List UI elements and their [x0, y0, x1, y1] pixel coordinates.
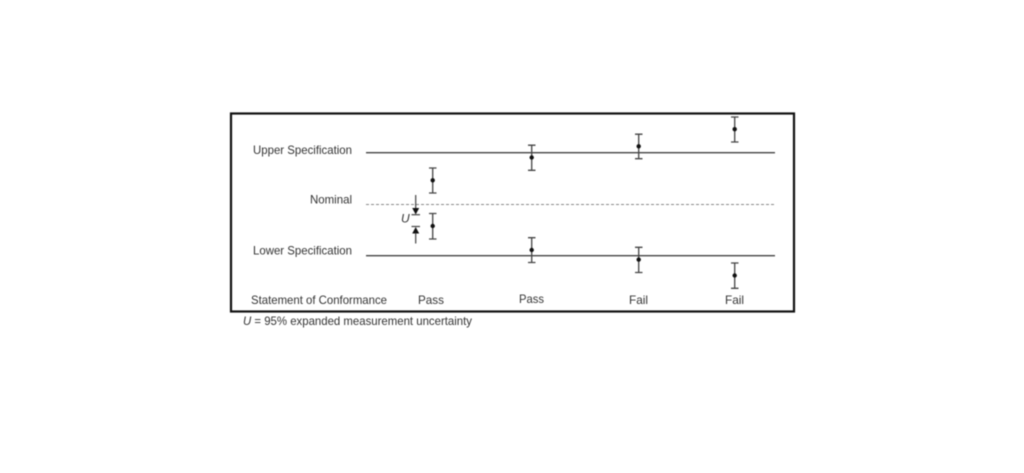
error bar: above upper limit, fail: [731, 117, 738, 142]
error bar: straddling lower limit, pass: [528, 238, 536, 262]
verdict: fail 2: Fail: [725, 293, 744, 307]
row label: statement of conformance: Statement of Conformance: [251, 293, 387, 307]
error bar: straddling upper limit, pass: [528, 145, 536, 170]
verdict: pass 2: Pass: [519, 292, 544, 306]
lower specification line: [366, 255, 775, 257]
upper specification line: [366, 152, 775, 154]
U label: U: [401, 212, 410, 226]
label: nominal: Nominal: [310, 192, 352, 206]
verdict: pass 1: Pass: [418, 293, 444, 307]
error bar: pass, upper region: [429, 168, 436, 193]
panel: diagram frame: [231, 114, 794, 312]
footnote: U = 95% expanded measurement uncertainty: [243, 314, 472, 328]
error bar: straddling lower limit, fail: [635, 247, 642, 272]
label: lower specification: Lower Specification: [253, 244, 352, 258]
error bar: straddling upper limit, fail: [635, 134, 642, 159]
error bar: below lower limit, fail: [731, 263, 738, 288]
nominal dashed line: [366, 204, 775, 206]
error bar: pass, lower region: [429, 214, 436, 239]
U dimension marker: [412, 195, 420, 244]
label: upper specification: Upper Specification: [253, 143, 352, 157]
verdict: fail 1: Fail: [629, 293, 648, 307]
